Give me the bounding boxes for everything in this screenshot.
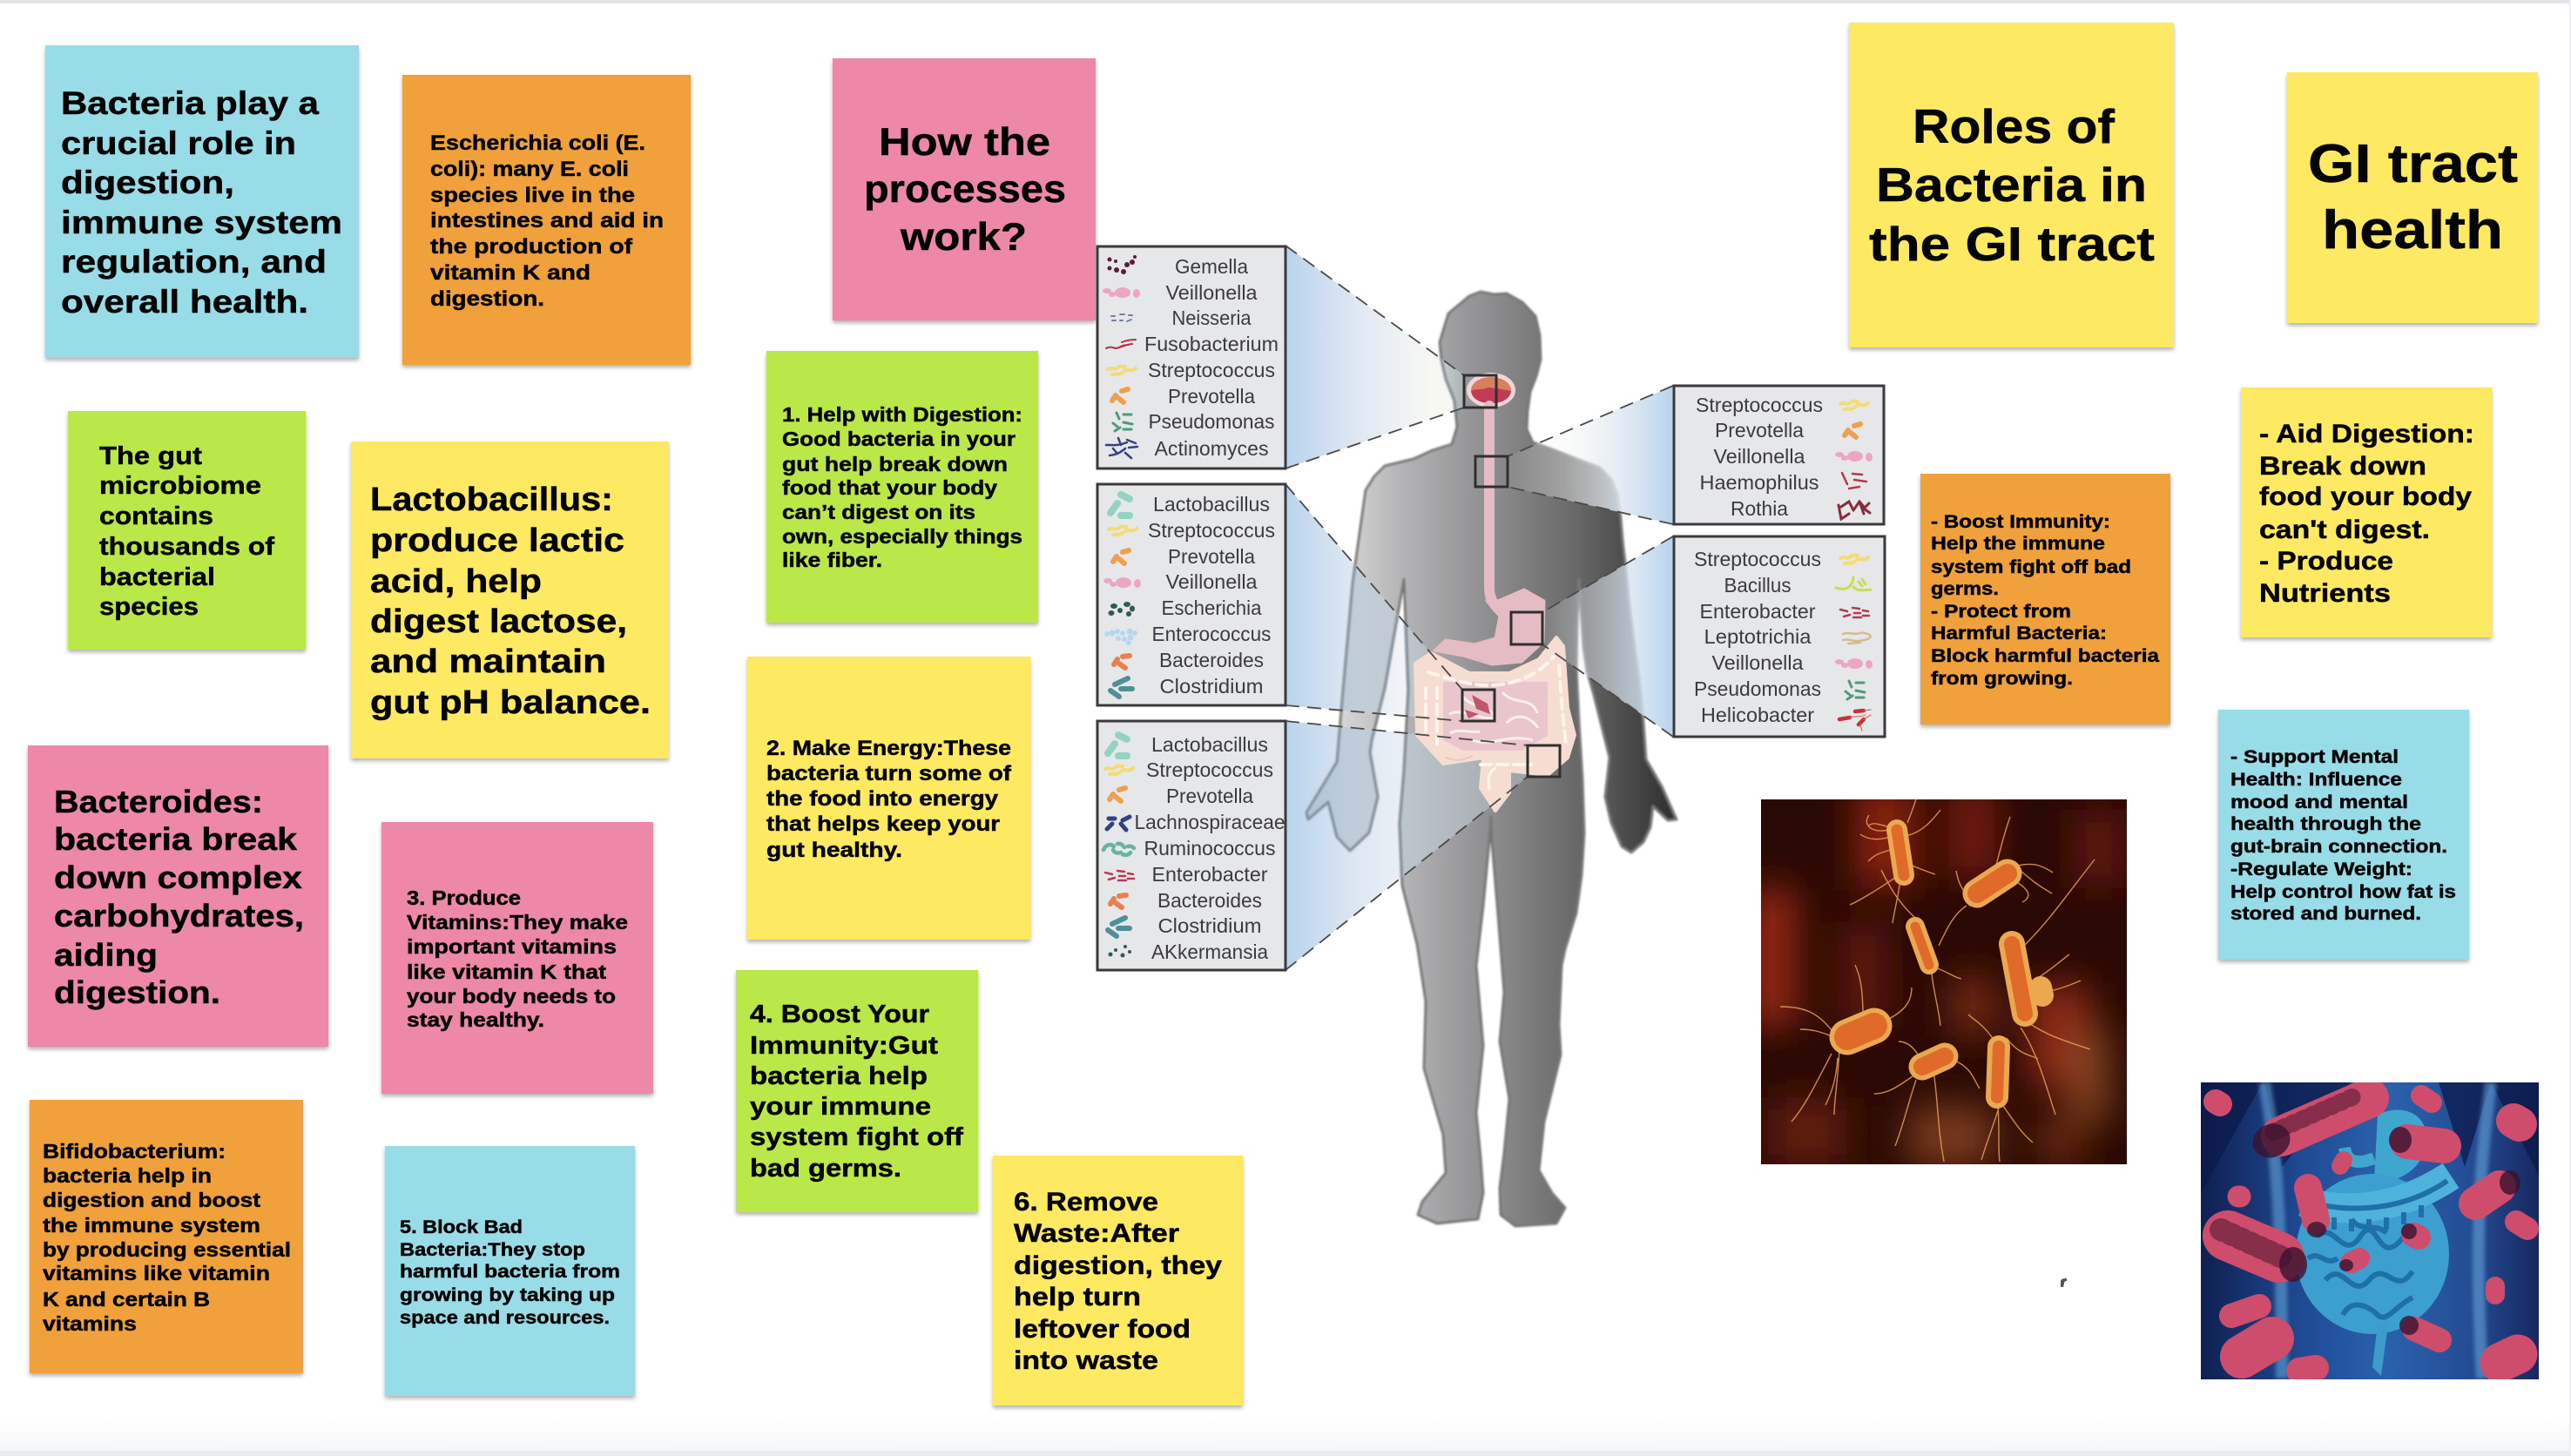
- card: step 1 help with digestion: 1. Help with Digestion:: [782, 403, 1022, 426]
- card: Escherichia coli: [402, 75, 691, 365]
- row: Neisseria: Neisseria: [1172, 307, 1252, 329]
- card: Bacteroides: Bacteroides:: [54, 784, 263, 819]
- card: step 1 help with digestion: Good bacteria in your: [782, 428, 1016, 450]
- card: Bacteroides: bacteria break: [54, 821, 298, 857]
- card: support mental health: - Support Mental: [2230, 747, 2399, 767]
- card: step 4 boost immunity: Immunity:Gut: [750, 1032, 938, 1060]
- card: Bifidobacterium: Bifidobacterium:: [43, 1140, 226, 1163]
- card: boost immunity: Harmful Bacteria:: [1931, 624, 2107, 644]
- row: Prevotella: Prevotella: [1166, 785, 1253, 807]
- row: Pseudomonas: Pseudomonas: [1148, 410, 1275, 433]
- card: Escherichia coli: digestion.: [430, 287, 544, 311]
- card: step 6 remove waste: leftover food: [1014, 1315, 1191, 1344]
- card: Bacteroides: aiding: [54, 937, 158, 973]
- card: step 6 remove waste: help turn: [1014, 1283, 1141, 1311]
- heading: how the processes work: How the: [879, 121, 1050, 164]
- row: Gemella: [1108, 255, 1248, 278]
- card: step 2 make energy: [747, 657, 1030, 940]
- row: Bacteroides: Bacteroides: [1159, 649, 1264, 671]
- row: Lactobacillus: Lactobacillus: [1153, 493, 1270, 516]
- row: Lachnospiraceae: Lachnospiraceae: [1134, 811, 1286, 833]
- small intestine: [1443, 682, 1548, 751]
- card: aid digestion: food your body: [2259, 482, 2472, 511]
- row: Prevotella: [1113, 545, 1255, 568]
- panel: esophagus bacteria: [1674, 386, 1884, 524]
- panel: mouth bacteria: [1097, 246, 1286, 468]
- card: step 3 produce vitamins: Vitamins:They make: [407, 911, 628, 934]
- card: Lactobacillus: Lactobacillus:: [370, 482, 613, 518]
- card: gut microbiome: The gut: [99, 442, 203, 470]
- heading: how the processes work: work?: [900, 216, 1027, 259]
- card: Bacteroides: digestion.: [54, 974, 220, 1010]
- row: Veillonella: Veillonella: [1712, 651, 1804, 674]
- card: step 4 boost immunity: 4. Boost Your: [750, 1001, 929, 1028]
- heading: GI tract health: GI tract: [2308, 134, 2518, 194]
- card: gut microbiome: [68, 411, 306, 650]
- card: step 6 remove waste: Waste:After: [1014, 1219, 1179, 1248]
- region marker squares: [1462, 375, 1560, 777]
- zoom wedge: stomach to panel: [1542, 536, 1673, 737]
- card: bacteria intro: regulation, and: [61, 244, 327, 280]
- row: Clostridium: Clostridium: [1160, 675, 1263, 698]
- row: Clostridium: Clostridium: [1158, 914, 1261, 937]
- row: Veillonella: [1103, 281, 1258, 304]
- card: Lactobacillus: produce lactic: [370, 522, 624, 559]
- zoom wedge: esophagus to panel: [1508, 386, 1673, 524]
- row: Rothia: Rothia: [1731, 497, 1788, 520]
- card: support mental health: Help control how fat is: [2230, 882, 2456, 902]
- card: step 2 make energy: 2. Make Energy:These: [766, 737, 1011, 760]
- row: Veillonella: Veillonella: [1714, 445, 1805, 468]
- zoom wedge: colon to panel: [1286, 721, 1528, 970]
- row: Pseudomonas: Pseudomonas: [1694, 677, 1821, 700]
- card: gut microbiome: thousands of: [99, 533, 275, 561]
- card: step 6 remove waste: [993, 1156, 1243, 1405]
- image: pink bacteria around blue intestines: [2201, 1082, 2539, 1379]
- card: Bifidobacterium: vitamins like vitamin: [43, 1262, 270, 1284]
- card: step 5 block bad bacteria: Bacteria:They stop: [400, 1239, 585, 1260]
- card: step 4 boost immunity: [736, 970, 978, 1212]
- row: Veillonella: [1712, 651, 1873, 674]
- heading: how the processes work: [833, 58, 1096, 320]
- row: Streptococcus: Streptococcus: [1148, 519, 1275, 542]
- colon bands: [1426, 657, 1566, 789]
- row: Veillonella: Veillonella: [1165, 281, 1258, 304]
- card: Lactobacillus: gut pH balance.: [370, 684, 651, 721]
- card: step 3 produce vitamins: 3. Produce: [407, 886, 521, 909]
- row: AKkermansia: AKkermansia: [1151, 940, 1268, 963]
- card: step 6 remove waste: digestion, they: [1014, 1251, 1222, 1280]
- card: boost immunity: germs.: [1931, 579, 1999, 599]
- heading: how the processes work: processes: [864, 168, 1066, 211]
- card: step 2 make energy: bacteria turn some of: [766, 762, 1012, 785]
- card: step 4 boost immunity: system fight off: [750, 1123, 963, 1151]
- card: step 6 remove waste: into waste: [1014, 1346, 1158, 1375]
- card: step 3 produce vitamins: stay healthy.: [407, 1008, 544, 1031]
- card: bacteria intro: [45, 45, 359, 358]
- heading: roles of bacteria: [1849, 23, 2174, 347]
- card: gut microbiome: species: [99, 593, 199, 621]
- card: Escherichia coli: coli): many E. coli: [430, 158, 629, 181]
- card: Bifidobacterium: vitamins: [43, 1312, 137, 1335]
- card: step 5 block bad bacteria: 5. Block Bad: [400, 1217, 523, 1237]
- card: step 6 remove waste: 6. Remove: [1014, 1188, 1158, 1217]
- card: Bifidobacterium: [30, 1100, 303, 1373]
- row: Enterobacter: Enterobacter: [1151, 863, 1268, 886]
- card: gut microbiome: contains: [99, 502, 213, 530]
- card: step 1 help with digestion: [766, 351, 1038, 623]
- row: Escherichia: [1108, 597, 1262, 619]
- row: Streptococcus: Streptococcus: [1694, 548, 1821, 570]
- card: gut microbiome: microbiome: [99, 472, 261, 500]
- card: step 5 block bad bacteria: harmful bacteria from: [400, 1261, 620, 1282]
- card: step 5 block bad bacteria: space and resources.: [400, 1307, 610, 1328]
- card: step 5 block bad bacteria: [385, 1146, 635, 1396]
- zoom wedge: small intestine to panel: [1286, 484, 1462, 721]
- card: step 1 help with digestion: own, especially things: [782, 525, 1022, 548]
- card: Bifidobacterium: by producing essential: [43, 1238, 291, 1261]
- row: Streptococcus: Streptococcus: [1696, 394, 1823, 416]
- row: Enterobacter: Enterobacter: [1700, 600, 1816, 623]
- large intestine backdrop: [1415, 637, 1575, 811]
- card: step 4 boost immunity: bacteria help: [750, 1062, 928, 1090]
- row: Prevotella: [1112, 385, 1255, 408]
- card: Bifidobacterium: K and certain B: [43, 1288, 210, 1311]
- panel: small intestine bacteria: [1097, 484, 1286, 705]
- panel: stomach bacteria: [1674, 536, 1885, 737]
- card: aid digestion: can't digest.: [2259, 516, 2430, 544]
- intestines: [2296, 1110, 2451, 1376]
- row: Clostridium: [1108, 914, 1261, 937]
- card: step 2 make energy: the food into energy: [766, 787, 999, 811]
- dashed leader lines: [1286, 246, 1673, 970]
- card: Escherichia coli: the production of: [430, 235, 633, 259]
- card: boost immunity: from growing.: [1931, 669, 2073, 689]
- card: support mental health: -Regulate Weight:: [2230, 859, 2412, 880]
- row: Enterobacter: [1700, 600, 1869, 623]
- card: Lactobacillus: digest lactose,: [370, 603, 627, 640]
- stomach: [1434, 590, 1544, 664]
- card: Escherichia coli: Escherichia coli (E.: [430, 131, 645, 155]
- card: step 3 produce vitamins: your body needs to: [407, 985, 616, 1008]
- image: orange E. coli bacteria: [1751, 784, 2127, 1167]
- human body silhouette: [1306, 292, 1677, 1226]
- row: Leptotrichia: Leptotrichia: [1704, 625, 1812, 648]
- row: Helicobacter: [1701, 704, 1871, 731]
- card: support mental health: [2218, 710, 2469, 960]
- mouth: [1467, 373, 1515, 408]
- row: Prevotella: Prevotella: [1715, 419, 1804, 442]
- card: Bifidobacterium: digestion and boost: [43, 1189, 260, 1211]
- row: Prevotella: [1715, 419, 1860, 442]
- row: Clostridium: [1110, 675, 1263, 698]
- card: Bifidobacterium: bacteria help in: [43, 1164, 212, 1187]
- zoom wedge: mouth to panel: [1286, 246, 1464, 468]
- body seen through left wedges: [1305, 357, 1526, 880]
- card: Lactobacillus: [351, 442, 669, 758]
- row: Bacteroides: Bacteroides: [1157, 889, 1262, 912]
- card: boost immunity: Help the immune: [1931, 534, 2105, 554]
- row: Streptococcus: Streptococcus: [1148, 359, 1275, 381]
- card: boost immunity: [1920, 474, 2170, 725]
- row: Actinomyces: [1106, 437, 1268, 460]
- card: aid digestion: - Aid Digestion:: [2259, 420, 2474, 448]
- row: Gemella: Gemella: [1175, 255, 1248, 278]
- row: Bacillus: Bacillus: [1724, 574, 1791, 597]
- card: support mental health: health through the: [2230, 814, 2421, 834]
- card: support mental health: stored and burned.: [2230, 904, 2421, 924]
- card: Bacteroides: [28, 745, 328, 1047]
- row: Bacteroides: [1110, 889, 1262, 912]
- card: bacteria intro: immune system: [61, 205, 342, 240]
- heading: roles of bacteria: Bacteria in: [1876, 158, 2147, 212]
- row: Prevotella: Prevotella: [1168, 545, 1255, 568]
- card: aid digestion: Nutrients: [2259, 579, 2391, 608]
- row: Leptotrichia: [1704, 625, 1871, 648]
- row: Ruminococcus: Ruminococcus: [1144, 837, 1275, 859]
- row: Streptococcus: Streptococcus: [1146, 758, 1273, 781]
- card: step 4 boost immunity: your immune: [750, 1093, 931, 1121]
- card: bacteria intro: Bacteria play a: [61, 85, 319, 121]
- row: Enterococcus: Enterococcus: [1151, 623, 1272, 645]
- card: aid digestion: - Produce: [2259, 547, 2393, 576]
- card: boost immunity: - Protect from: [1931, 602, 2071, 622]
- card: Escherichia coli: intestines and aid in: [430, 209, 664, 233]
- card: bacteria intro: digestion,: [61, 165, 234, 200]
- row: Bacteroides: [1114, 649, 1264, 671]
- card: step 5 block bad bacteria: growing by taking up: [400, 1284, 615, 1305]
- row: Actinomyces: Actinomyces: [1155, 437, 1268, 460]
- card: boost immunity: Block harmful bacteria: [1931, 646, 2159, 666]
- card: step 4 boost immunity: bad germs.: [750, 1155, 901, 1183]
- cursor mark: [2061, 1278, 2067, 1287]
- card: aid digestion: [2241, 388, 2492, 637]
- card: Escherichia coli: species live in the: [430, 184, 635, 207]
- row: Fusobacterium: Fusobacterium: [1144, 333, 1279, 355]
- card: step 2 make energy: that helps keep your: [766, 812, 1000, 836]
- heading: GI tract health: [2287, 72, 2538, 323]
- row: Neisseria: [1111, 307, 1252, 329]
- digestive organs: [1415, 373, 1575, 811]
- card: Bacteroides: down complex: [54, 859, 302, 895]
- row: Prevotella: Prevotella: [1168, 385, 1255, 408]
- card: Bacteroides: carbohydrates,: [54, 898, 304, 934]
- card: Escherichia coli: vitamin K and: [430, 261, 590, 285]
- row: Bacillus: [1724, 574, 1871, 597]
- card: step 1 help with digestion: gut help break down: [782, 453, 1008, 475]
- heading: roles of bacteria: Roles of: [1913, 99, 2116, 153]
- row: Veillonella: [1714, 445, 1873, 468]
- card: step 3 produce vitamins: [381, 822, 653, 1094]
- row: Veillonella: Veillonella: [1165, 570, 1258, 593]
- card: Lactobacillus: acid, help: [370, 563, 542, 600]
- heading: GI tract health: health: [2322, 200, 2503, 260]
- row: Haemophilus: Haemophilus: [1700, 471, 1819, 494]
- card: boost immunity: - Boost Immunity:: [1931, 512, 2110, 532]
- card: bacteria intro: crucial role in: [61, 125, 296, 161]
- card: aid digestion: Break down: [2259, 452, 2426, 481]
- card: step 3 produce vitamins: like vitamin K that: [407, 961, 606, 983]
- row: Escherichia: Escherichia: [1162, 597, 1262, 619]
- card: gut microbiome: bacterial: [99, 563, 215, 591]
- card: boost immunity: system fight off bad: [1931, 557, 2131, 577]
- row: Lactobacillus: Lactobacillus: [1151, 733, 1268, 756]
- card: support mental health: gut-brain connection.: [2230, 837, 2447, 857]
- card: support mental health: Health: Influence: [2230, 770, 2402, 790]
- card: step 1 help with digestion: can’t digest on its: [782, 501, 975, 523]
- heading: roles of bacteria: the GI tract: [1869, 217, 2155, 271]
- row: Helicobacter: Helicobacter: [1701, 704, 1814, 726]
- card: step 1 help with digestion: like fiber.: [782, 549, 882, 571]
- card: Lactobacillus: and maintain: [370, 644, 606, 680]
- row: Prevotella: [1110, 785, 1253, 807]
- panel: colon bacteria: [1097, 721, 1286, 970]
- row: Rothia: [1731, 497, 1870, 520]
- card: support mental health: mood and mental: [2230, 792, 2408, 812]
- card: step 3 produce vitamins: important vitamins: [407, 935, 617, 958]
- row: Veillonella: [1103, 570, 1258, 593]
- card: step 1 help with digestion: food that your body: [782, 476, 997, 499]
- card: step 2 make energy: gut healthy.: [766, 839, 902, 862]
- esophagus: [1489, 406, 1501, 612]
- card: bacteria intro: overall health.: [61, 284, 308, 320]
- card: Bifidobacterium: the immune system: [43, 1214, 260, 1237]
